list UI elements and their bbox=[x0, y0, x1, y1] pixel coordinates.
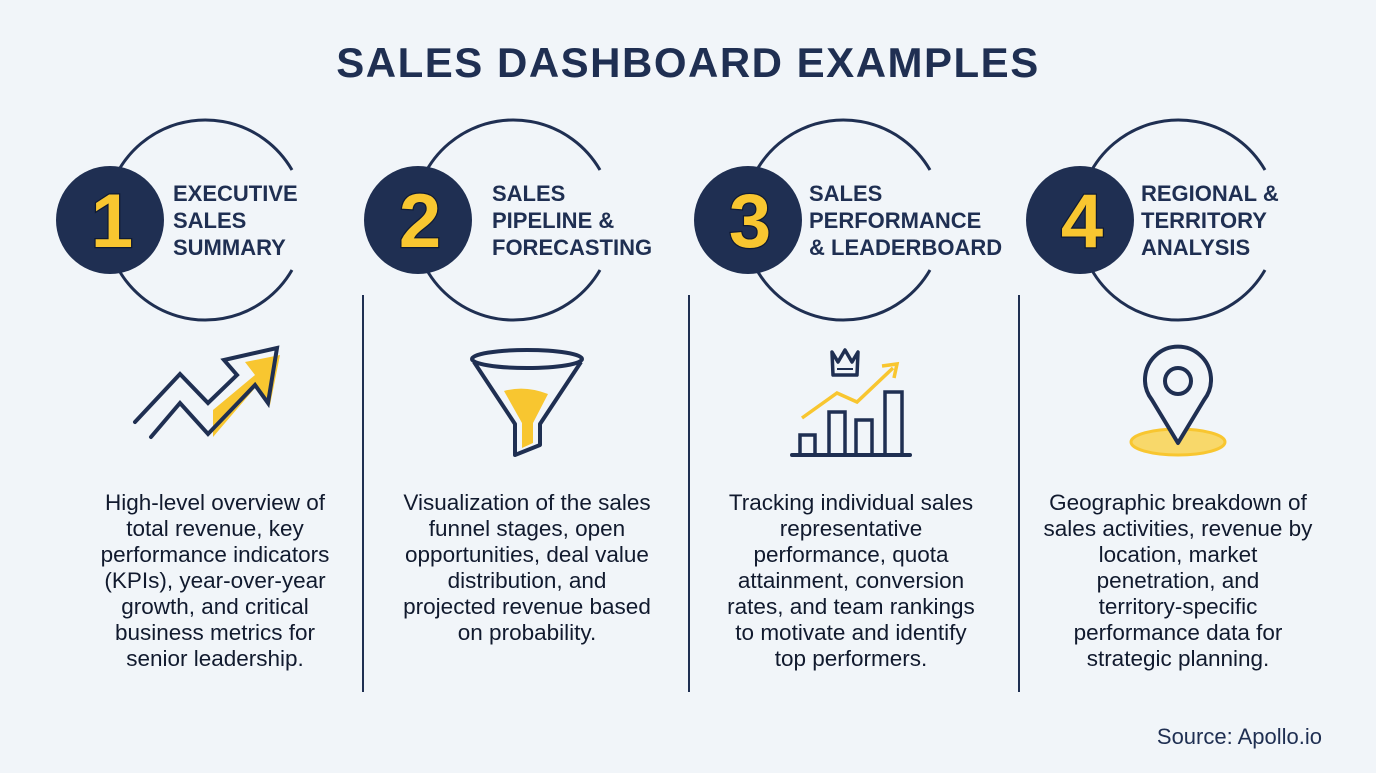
text: column 2 description: distribution, and bbox=[448, 568, 606, 593]
header 2: PIPELINE & bbox=[492, 208, 614, 233]
header 2: FORECASTING bbox=[492, 235, 652, 260]
icon: funnel bbox=[472, 350, 582, 455]
header 1 bbox=[56, 120, 298, 320]
text: column 1 description: total revenue, key bbox=[126, 516, 305, 541]
header 4: REGIONAL & bbox=[1141, 181, 1279, 206]
text: column 4 description: location, market bbox=[1099, 542, 1258, 567]
text: column 4 description: performance data for bbox=[1074, 620, 1283, 645]
header 4 bbox=[1026, 120, 1279, 320]
text: column 3 description: attainment, conversion bbox=[738, 568, 964, 593]
header 2: 2 bbox=[399, 179, 441, 264]
header 3: SALES bbox=[809, 181, 882, 206]
text: column 4 description: strategic planning. bbox=[1087, 646, 1269, 671]
header 3: & LEADERBOARD bbox=[809, 235, 1002, 260]
header 1: SUMMARY bbox=[173, 235, 286, 260]
text: column 1 description: performance indicators bbox=[101, 542, 329, 567]
header 4: TERRITORY bbox=[1141, 208, 1267, 233]
header 4: 4 bbox=[1061, 179, 1103, 264]
header 2 bbox=[364, 120, 652, 320]
text: column 2 description: funnel stages, open bbox=[429, 516, 625, 541]
header 4: ANALYSIS bbox=[1141, 235, 1250, 260]
icon: leaderboard chart bbox=[792, 350, 910, 455]
text: column 2 description: Visualization of the sales bbox=[403, 490, 651, 515]
text: column 3 description: Tracking individual sales bbox=[729, 490, 973, 515]
text: column 1 description: (KPIs), year-over-year bbox=[104, 568, 326, 593]
text: column 2 description: projected revenue based bbox=[403, 594, 651, 619]
header 1: EXECUTIVE bbox=[173, 181, 298, 206]
source: Source: Apollo.io bbox=[1157, 724, 1322, 749]
text: column 1 description: High-level overview of bbox=[105, 490, 326, 515]
title: SALES DASHBOARD EXAMPLES bbox=[336, 39, 1040, 86]
text: column 4 description: territory-specific bbox=[1099, 594, 1257, 619]
header 1: 1 bbox=[91, 179, 133, 264]
text: column 1 description: growth, and critical bbox=[121, 594, 309, 619]
header 2: SALES bbox=[492, 181, 565, 206]
header 3 bbox=[694, 120, 1002, 320]
text: column 3 description: representative bbox=[780, 516, 922, 541]
text: column 1 description: business metrics for bbox=[115, 620, 316, 645]
text: column 2 description: on probability. bbox=[458, 620, 596, 645]
text: column 4 description: sales activities, revenue by bbox=[1044, 516, 1313, 541]
text: column 4 description: Geographic breakdown of bbox=[1049, 490, 1308, 515]
header 1: SALES bbox=[173, 208, 246, 233]
text: column 1 description: senior leadership. bbox=[126, 646, 304, 671]
header 3: 3 bbox=[729, 179, 771, 264]
text: column 3 description: to motivate and identify bbox=[735, 620, 967, 645]
text: column 3 description: rates, and team rankings bbox=[727, 594, 975, 619]
text: column 2 description: opportunities, deal value bbox=[405, 542, 649, 567]
text: column 3 description: top performers. bbox=[775, 646, 927, 671]
text: column 3 description: performance, quota bbox=[753, 542, 949, 567]
icon: trend arrow bbox=[135, 348, 280, 437]
header 3: PERFORMANCE bbox=[809, 208, 981, 233]
icon: map pin bbox=[1131, 347, 1225, 455]
text: column 4 description: penetration, and bbox=[1097, 568, 1259, 593]
